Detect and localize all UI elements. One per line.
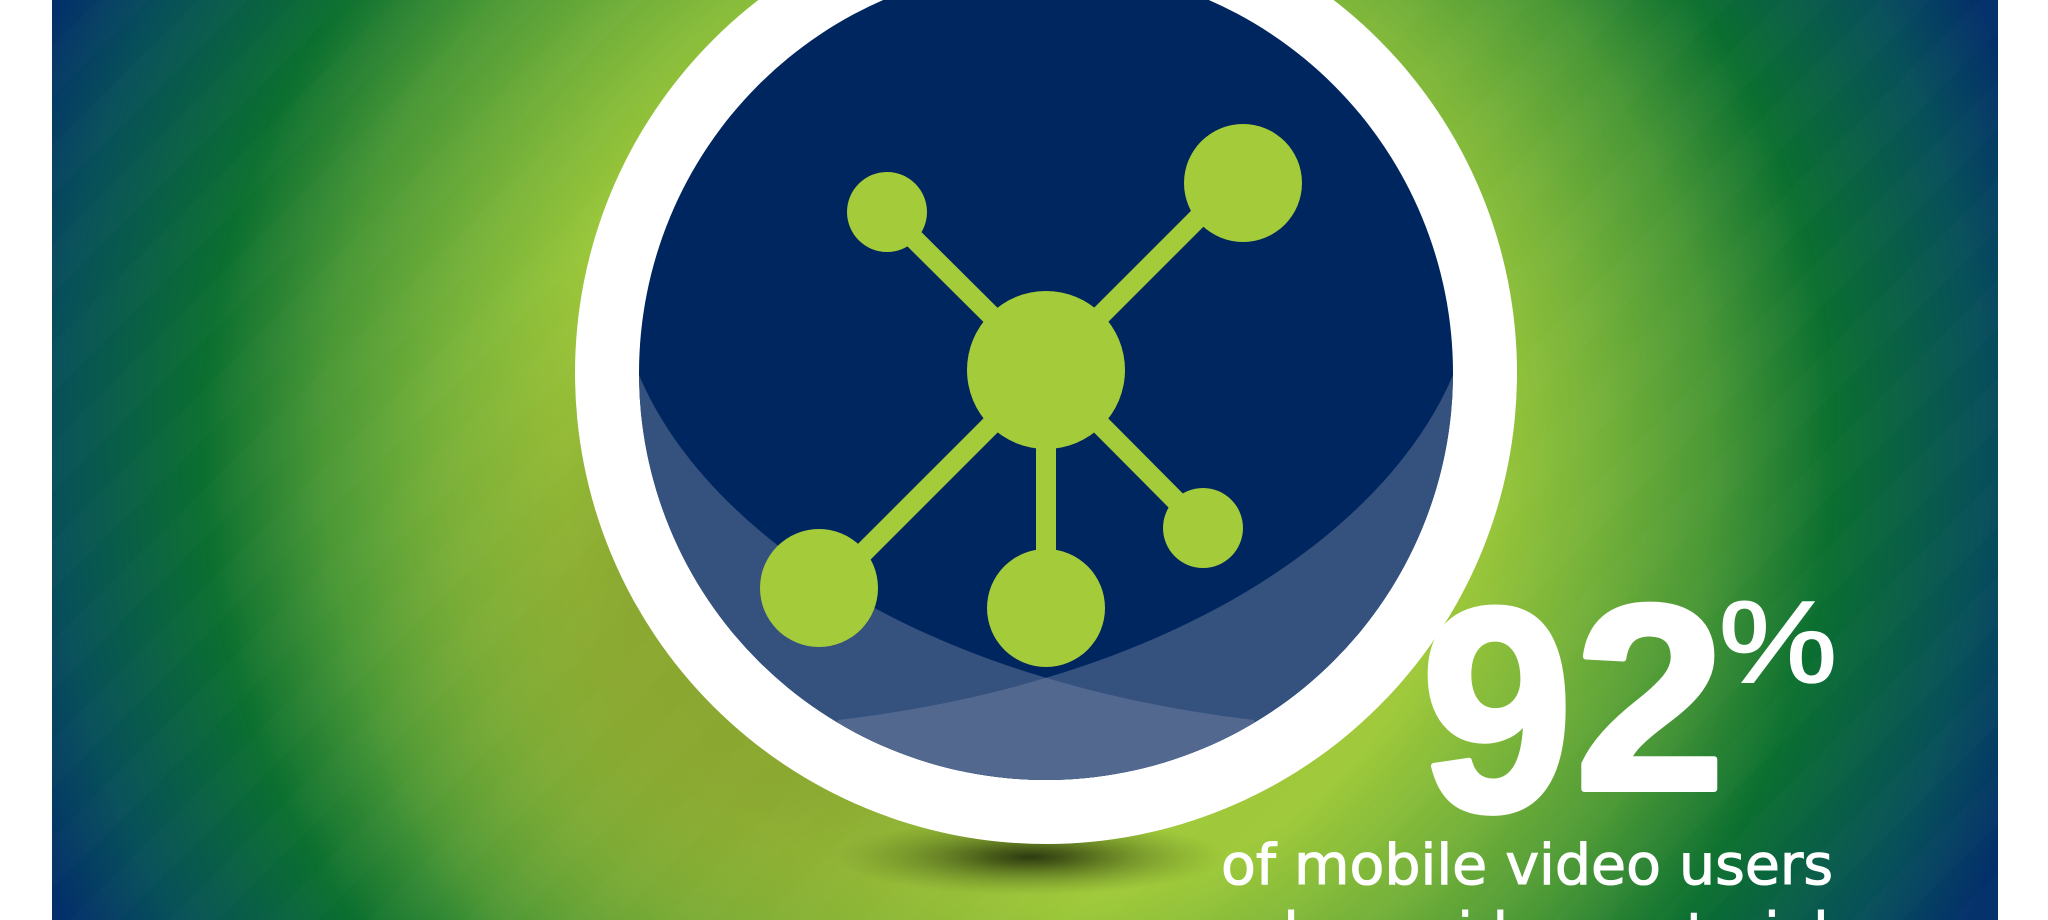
- statistic: 92 percent: %: [1719, 577, 1837, 707]
- caption text: of mobile video users: [1221, 833, 1833, 898]
- statistic: 92 percent: 9: [1421, 548, 1573, 872]
- white ring with navy disc: [560, 0, 1532, 860]
- circle drop shadow: [835, 819, 1225, 895]
- statistic: 92 percent: 2: [1575, 550, 1725, 845]
- icon: network hub: [760, 124, 1302, 667]
- statistic: 92 percent: [1421, 548, 1837, 872]
